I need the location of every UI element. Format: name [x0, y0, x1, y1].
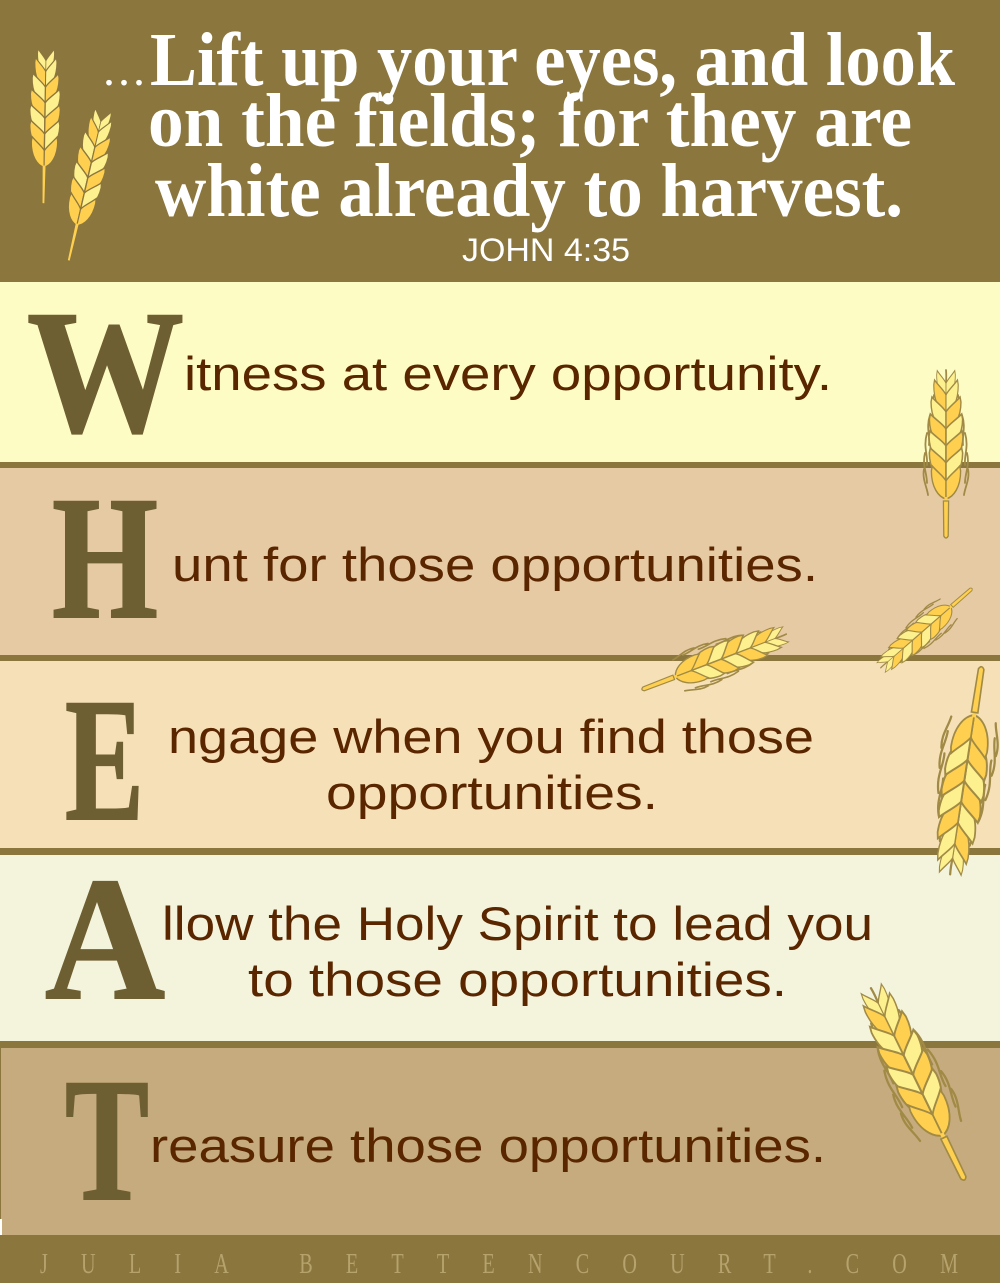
panel: allow [0, 842, 1000, 1041]
treasure text: reasure those opportunities. [150, 1119, 826, 1172]
icon: awned wheat 3 [870, 576, 983, 680]
quote text [103, 18, 956, 233]
icon: wheat ear left [28, 49, 61, 203]
icon: awned wheat 5 [845, 976, 990, 1192]
icon: awned wheat 4 [922, 663, 1000, 879]
panel: hunt [0, 461, 1000, 656]
icon: wheat ear right [54, 107, 119, 264]
engage text: opportunities. [326, 766, 658, 819]
quote text: white already to harvest. [155, 149, 903, 233]
quote text: Lift up your eyes, and look [150, 18, 956, 102]
panel: witness [0, 275, 1000, 470]
quote text: on the fields; for they are [148, 79, 912, 163]
allow text: to those opportunities. [248, 953, 787, 1006]
panel: engage [0, 655, 1000, 858]
initial W: W [27, 275, 184, 470]
engage text: ngage when you find those [168, 710, 814, 763]
scripture reference: JOHN 4:35 [462, 232, 630, 268]
header panel [0, 0, 1000, 282]
icon: awned wheat 1 [924, 370, 968, 538]
initial T: T [65, 1043, 149, 1238]
witness text: itness at every opportunity. [184, 347, 832, 400]
quote text: ... [103, 43, 145, 96]
panel: treasure [0, 1041, 1000, 1238]
engage text [168, 710, 814, 819]
allow text [162, 897, 873, 1006]
icon: awned wheat 2 [635, 615, 794, 709]
footer [0, 1235, 1000, 1283]
initial H: H [52, 461, 158, 656]
allow text: llow the Holy Spirit to lead you [162, 897, 873, 950]
initial A: A [45, 842, 165, 1037]
hunt text: unt for those opportunities. [172, 538, 818, 591]
footer website text: JULIA BETTENCOURT.COM [40, 1249, 958, 1280]
initial E: E [65, 663, 144, 858]
